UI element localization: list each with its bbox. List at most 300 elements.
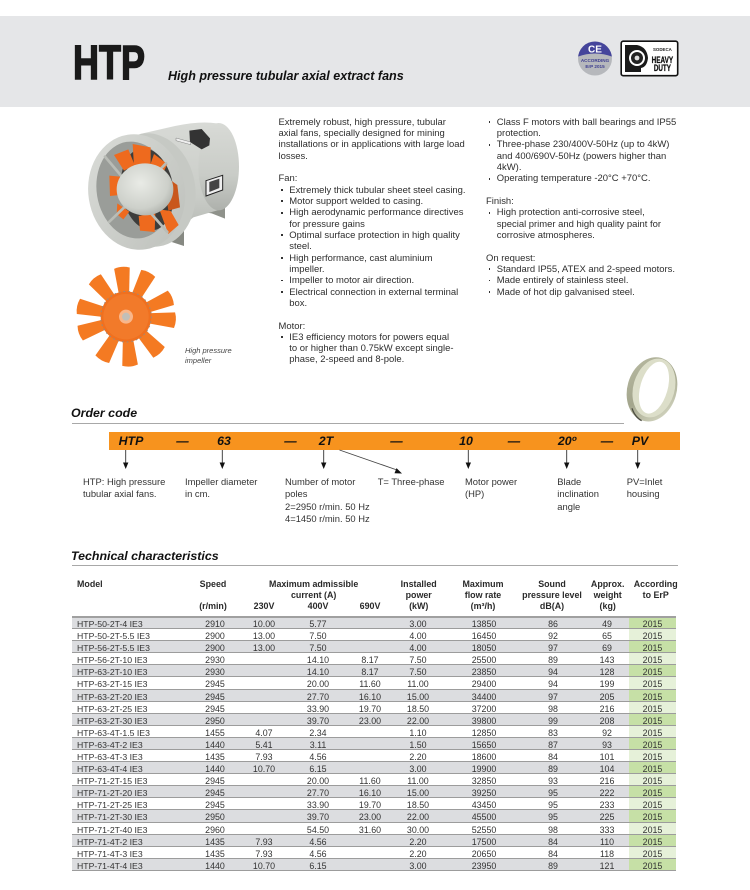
text: motor features bbox=[278, 320, 454, 365]
text: on request: On request: bbox=[486, 253, 535, 264]
text: on request: Made entirely of stainless steel. bbox=[497, 275, 628, 286]
table: technical data: 2015 bbox=[643, 752, 662, 762]
table: technical data: 19900 bbox=[472, 764, 496, 774]
product image: axial fan and impeller bbox=[76, 122, 239, 367]
table: technical data: 19.70 bbox=[359, 800, 381, 810]
label: inlet housing bbox=[627, 476, 662, 499]
table header: to ErP bbox=[643, 590, 669, 600]
table: technical data: 15.00 bbox=[407, 788, 429, 798]
table: technical data: 4.07 bbox=[255, 728, 273, 738]
table: technical data: HTP-56-2T-10 IE3 bbox=[77, 655, 148, 665]
table: technical data: 222 bbox=[600, 788, 614, 798]
table: technical data: 16.10 bbox=[359, 788, 381, 798]
table: technical data: 23850 bbox=[472, 667, 496, 677]
table: technical data: 2945 bbox=[205, 679, 225, 689]
label: motor power bbox=[465, 476, 517, 499]
table: technical data: 118 bbox=[600, 849, 614, 859]
table: technical data: 7.93 bbox=[255, 849, 273, 859]
icon: CE ErP 2015 badge: ACCORDING bbox=[581, 58, 610, 63]
table: technical data: 2945 bbox=[205, 800, 225, 810]
table: technical data: HTP-63-2T-30 IE3 bbox=[77, 716, 148, 726]
table: technical data: 2015 bbox=[643, 788, 662, 798]
table: technical data: HTP-63-2T-20 IE3 bbox=[77, 692, 148, 702]
table: technical data: HTP-50-2T-5.5 IE3 bbox=[77, 631, 150, 641]
label: three-phase: T= Three-phase bbox=[378, 476, 444, 486]
text: motor features continued: and 400/690V-50Hz (powers higher than bbox=[497, 151, 666, 162]
table: technical data: 23950 bbox=[472, 861, 496, 871]
table: technical data: 65 bbox=[602, 631, 612, 641]
table: technical data: 14.10 bbox=[307, 667, 329, 677]
table: technical data: 2015 bbox=[643, 631, 662, 641]
table: technical data: HTP-63-4T-1.5 IE3 bbox=[77, 728, 150, 738]
table: technical data: 2015 bbox=[643, 812, 662, 822]
table: technical data: 2015 bbox=[643, 728, 662, 738]
table: technical data: 33.90 bbox=[307, 800, 329, 810]
table: technical data: 32850 bbox=[472, 776, 496, 786]
table: technical data: 1.50 bbox=[409, 740, 427, 750]
table header: 690V bbox=[360, 600, 380, 610]
label: motor power: Motor power bbox=[465, 476, 517, 486]
table: technical data: 1435 bbox=[205, 837, 225, 847]
table: technical data: 2015 bbox=[643, 716, 662, 726]
label: blade angle: angle bbox=[557, 501, 580, 512]
table: technical data: 3.11 bbox=[310, 740, 326, 750]
table: technical data: 10.70 bbox=[253, 764, 275, 774]
text: intro: installations or in applications with large load bbox=[278, 139, 465, 150]
table: technical data: 2015 bbox=[643, 861, 662, 871]
text: finish: Finish: bbox=[486, 196, 514, 207]
table: technical data: HTP-71-4T-3 IE3 bbox=[77, 849, 143, 859]
table header: power bbox=[406, 590, 432, 600]
text: motor features continued: 4kW). bbox=[497, 162, 521, 173]
text: fan features: steel. bbox=[289, 241, 312, 252]
table: technical data: HTP-71-2T-40 IE3 bbox=[77, 825, 148, 835]
table: technical data: HTP-63-2T-10 IE3 bbox=[77, 667, 148, 677]
table: technical data: 17500 bbox=[472, 837, 496, 847]
table: technical data: 30.00 bbox=[407, 825, 429, 835]
table: technical data: 22.00 bbox=[407, 716, 429, 726]
table: technical data: 2015 bbox=[643, 740, 662, 750]
table: technical data: 7.93 bbox=[255, 752, 273, 762]
text: fan features: Fan: bbox=[278, 173, 297, 184]
table: technical data: 18050 bbox=[472, 643, 496, 653]
text: motor features continued: protection. bbox=[497, 128, 541, 139]
table: technical data: 333 bbox=[600, 825, 614, 835]
text: motor features: IE3 efficiency motors for powers equal bbox=[289, 332, 449, 343]
table: technical data: 2945 bbox=[205, 788, 225, 798]
table: technical data: 2.20 bbox=[409, 752, 427, 762]
table: technical data: 2015 bbox=[643, 764, 662, 774]
order code bar: 10 bbox=[459, 434, 473, 448]
table: technical data: 7.50 bbox=[409, 655, 427, 665]
table header: weight bbox=[594, 590, 622, 600]
text: intro: Extremely robust, high pressure, tubular bbox=[278, 117, 446, 128]
table: technical data: 2945 bbox=[205, 776, 225, 786]
table: technical data: 2015 bbox=[643, 849, 662, 859]
table: technical data: 45500 bbox=[472, 812, 496, 822]
table header: Maximum bbox=[463, 579, 503, 589]
table: technical data: 19.70 bbox=[359, 704, 381, 714]
table: technical data: 11.60 bbox=[359, 776, 381, 786]
text: motor features continued: Operating temperature -20°C +70°C. bbox=[497, 173, 650, 184]
label: inlet housing: PV=Inlet bbox=[627, 476, 662, 486]
table: technical data: 8.17 bbox=[361, 667, 379, 677]
table: technical data: 2930 bbox=[205, 667, 225, 677]
icon: CE ErP 2015 badge: CE bbox=[588, 44, 602, 56]
table: technical data: 2015 bbox=[643, 692, 662, 702]
table: technical data: 2015 bbox=[643, 655, 662, 665]
table: technical data: 20.00 bbox=[307, 679, 329, 689]
table: technical data: 27.70 bbox=[307, 788, 329, 798]
table header: 400V bbox=[308, 600, 328, 610]
text: fan features: Electrical connection in external terminal bbox=[289, 287, 458, 298]
table: technical data: 2900 bbox=[205, 631, 225, 641]
text: motor features continued: Three-phase 230/400V-50Hz (up to 4kW) bbox=[497, 139, 669, 150]
table: technical data: 92 bbox=[548, 631, 558, 641]
fan blades bbox=[109, 144, 180, 234]
table: technical data: 13.00 bbox=[253, 643, 275, 653]
table: technical data: 4.56 bbox=[309, 837, 327, 847]
text: fan features: for pressure gains bbox=[289, 219, 365, 230]
table: technical data: HTP-71-4T-2 IE3 bbox=[77, 837, 143, 847]
table: technical data: 2.20 bbox=[409, 849, 427, 859]
table: technical data: 43450 bbox=[472, 800, 496, 810]
heading: order code: Order code bbox=[71, 406, 137, 420]
text: fan features: box. bbox=[289, 298, 307, 309]
text: motor features: to or higher than 0.75kW except single- bbox=[289, 343, 454, 354]
text: motor features continued bbox=[489, 117, 676, 184]
label: HTP bbox=[83, 476, 165, 499]
table: technical data: 4.56 bbox=[309, 849, 327, 859]
table: technical data: 5.41 bbox=[255, 740, 273, 750]
arrow: PV bbox=[635, 450, 640, 469]
table: technical data: HTP-71-2T-20 IE3 bbox=[77, 788, 148, 798]
table: technical data: 94 bbox=[548, 679, 558, 689]
table: technical data: 2910 bbox=[205, 619, 225, 629]
table: technical data: 14.10 bbox=[307, 655, 329, 665]
text: fan features bbox=[278, 173, 466, 309]
table: technical data: 89 bbox=[548, 764, 558, 774]
table: technical data: 1.10 bbox=[409, 728, 427, 738]
table: technical data: 16.10 bbox=[359, 692, 381, 702]
heading: technical characteristics: Technical characteristics bbox=[71, 548, 219, 562]
order code bar: PV bbox=[632, 434, 648, 448]
label: impeller diameter: Impeller diameter bbox=[185, 476, 257, 486]
table: technical data: 15.00 bbox=[407, 692, 429, 702]
table: technical data: 4.56 bbox=[309, 752, 327, 762]
label: motor poles: poles bbox=[285, 488, 307, 499]
text: finish: special primer and high quality paint for bbox=[497, 219, 661, 230]
table: technical data: 11.00 bbox=[407, 679, 429, 689]
order code bar: — bbox=[601, 434, 613, 448]
table header: (m³/h) bbox=[471, 600, 495, 610]
table header: pressure level bbox=[522, 590, 582, 600]
table: technical data: HTP-56-2T-5.5 IE3 bbox=[77, 643, 150, 653]
table header: (r/min) bbox=[199, 600, 227, 610]
table: technical data: HTP-71-2T-15 IE3 bbox=[77, 776, 148, 786]
title: HTP bbox=[72, 37, 144, 90]
text: motor features continued: Class F motors with ball bearings and IP55 bbox=[497, 117, 676, 128]
table: technical data: HTP-71-2T-30 IE3 bbox=[77, 812, 148, 822]
arrow: 2T bbox=[321, 450, 326, 469]
table: technical data: 2.34 bbox=[309, 728, 327, 738]
table: technical data: 95 bbox=[548, 788, 558, 798]
icon: Sodeca heavy duty badge: SODECA bbox=[653, 47, 673, 52]
table: technical data: 2015 bbox=[643, 643, 662, 653]
table: technical data: 15650 bbox=[472, 740, 496, 750]
text: fan features: Motor support welded to casing. bbox=[289, 196, 423, 207]
table header: Sound bbox=[538, 579, 566, 589]
text: finish: corrosive atmospheres. bbox=[497, 230, 595, 241]
text: motor features: phase, 2-speed and 8-pole. bbox=[289, 354, 404, 365]
table: technical data: HTP-71-4T-4 IE3 bbox=[77, 861, 143, 871]
table: technical data: 12850 bbox=[472, 728, 496, 738]
table: technical data: 83 bbox=[548, 728, 558, 738]
table: technical data: 205 bbox=[600, 692, 614, 702]
table: technical data: 7.50 bbox=[309, 643, 327, 653]
table: technical data: 31.60 bbox=[359, 825, 381, 835]
table: technical data: 233 bbox=[600, 800, 614, 810]
table: technical data: 52550 bbox=[472, 825, 496, 835]
table: technical data: 2945 bbox=[205, 704, 225, 714]
table header: 230V bbox=[254, 600, 274, 610]
label: motor poles bbox=[285, 476, 370, 524]
label: motor poles: Number of motor bbox=[285, 476, 355, 486]
table: technical data: 92 bbox=[602, 728, 612, 738]
label: HTP: HTP: High pressure bbox=[83, 476, 165, 487]
table: technical data: 98 bbox=[548, 704, 558, 714]
order code bar: 20º bbox=[558, 434, 576, 448]
table: technical data: 2015 bbox=[643, 704, 662, 714]
table: technical data: 143 bbox=[600, 655, 614, 665]
table: technical data: 27.70 bbox=[307, 692, 329, 702]
text: fan features: Extremely thick tubular sheet steel casing. bbox=[289, 185, 466, 196]
hub and struts bbox=[105, 157, 173, 232]
table: technical data: 128 bbox=[600, 667, 614, 677]
order code bar: 2T bbox=[319, 434, 333, 448]
text: on request: Made of hot dip galvanised steel. bbox=[497, 287, 635, 298]
table: technical data: 16450 bbox=[472, 631, 496, 641]
table: technical data: 20.00 bbox=[307, 776, 329, 786]
table header: (kW) bbox=[409, 600, 428, 610]
table: technical data: 6.15 bbox=[309, 861, 327, 871]
table: technical data: 2015 bbox=[643, 679, 662, 689]
table: technical data: 2945 bbox=[205, 692, 225, 702]
table: technical data: 93 bbox=[548, 776, 558, 786]
order code bar: — bbox=[284, 434, 297, 448]
table: technical data: 121 bbox=[600, 861, 614, 871]
caption: impeller bbox=[185, 346, 232, 365]
label: blade angle bbox=[557, 476, 599, 512]
table: technical data bbox=[72, 616, 676, 871]
text: motor features: Motor: bbox=[278, 320, 305, 332]
text: on request: Standard IP55, ATEX and 2-speed motors. bbox=[497, 264, 675, 275]
table: technical data: 22.00 bbox=[407, 812, 429, 822]
icon: Sodeca heavy duty badge bbox=[620, 40, 678, 76]
table: technical data: 1440 bbox=[205, 764, 225, 774]
table: technical data: 3.00 bbox=[409, 861, 427, 871]
label: motor poles: 4=1450 r/min. 50 Hz bbox=[285, 513, 370, 524]
table: technical data: 99 bbox=[548, 716, 558, 726]
table: technical data: 89 bbox=[548, 861, 558, 871]
text: intro bbox=[278, 117, 465, 162]
table: technical data: 1440 bbox=[205, 740, 225, 750]
label: motor power: (HP) bbox=[465, 488, 484, 499]
table: technical data: 1435 bbox=[205, 752, 225, 762]
table: technical data: 5.77 bbox=[309, 619, 327, 629]
table header: According bbox=[634, 579, 678, 589]
table: technical data: 7.93 bbox=[255, 837, 273, 847]
table: technical data: 39250 bbox=[472, 788, 496, 798]
table: technical data: 199 bbox=[600, 679, 614, 689]
table: technical data: 84 bbox=[548, 849, 558, 859]
table: technical data: 8.17 bbox=[361, 655, 379, 665]
table: technical data: HTP-63-2T-25 IE3 bbox=[77, 704, 148, 714]
table: technical data: 2015 bbox=[643, 825, 662, 835]
table: technical data: 4.00 bbox=[409, 643, 427, 653]
label: motor poles: 2=2950 r/min. 50 Hz bbox=[285, 501, 370, 512]
table: technical data: 6.15 bbox=[309, 764, 327, 774]
arrow: 20 degrees bbox=[564, 450, 569, 469]
table: technical data: 4.00 bbox=[409, 631, 427, 641]
table: technical data: HTP-63-4T-2 IE3 bbox=[77, 740, 143, 750]
table: technical data: 13850 bbox=[472, 619, 496, 629]
table: technical data: 2930 bbox=[205, 655, 225, 665]
text: fan features: impeller. bbox=[289, 264, 324, 275]
table: technical data: 39.70 bbox=[307, 716, 329, 726]
table: technical data: HTP-63-2T-15 IE3 bbox=[77, 679, 148, 689]
label: blade angle: Blade bbox=[557, 476, 581, 486]
impeller blades bbox=[75, 266, 176, 367]
table: technical data: 84 bbox=[548, 837, 558, 847]
caption: impeller: High pressure bbox=[185, 346, 232, 355]
table: technical data: 97 bbox=[548, 692, 558, 702]
label: HTP: tubular axial fans. bbox=[83, 488, 156, 499]
label: impeller diameter: in cm. bbox=[185, 488, 210, 499]
table: technical data: 104 bbox=[600, 764, 614, 774]
order code bar: 63 bbox=[217, 434, 231, 448]
table: technical data: 39.70 bbox=[307, 812, 329, 822]
table: technical data: 97 bbox=[548, 643, 558, 653]
table: technical data: 25500 bbox=[472, 655, 496, 665]
order code bar: HTP bbox=[119, 434, 143, 448]
table: technical data: 34400 bbox=[472, 692, 496, 702]
table: technical data: 11.00 bbox=[407, 776, 429, 786]
icon: CE ErP 2015 badge: ErP 2015 bbox=[585, 64, 605, 69]
impeller hub bbox=[101, 291, 151, 342]
table: technical data: 23.00 bbox=[359, 812, 381, 822]
caption: impeller: impeller bbox=[185, 356, 211, 365]
text: intro: losses. bbox=[278, 151, 308, 162]
table: technical data: HTP-50-2T-4 IE3 bbox=[77, 619, 143, 629]
text: finish bbox=[486, 196, 661, 241]
text: intro: axial fans, specially designed for mining bbox=[278, 128, 445, 139]
table: technical data: 1455 bbox=[205, 728, 225, 738]
table: technical data: 18.50 bbox=[407, 800, 429, 810]
table header: Speed bbox=[200, 579, 226, 589]
table: technical data: 86 bbox=[548, 619, 558, 629]
table: technical data: 110 bbox=[600, 837, 614, 847]
table: technical data: 2015 bbox=[643, 619, 662, 629]
table: technical data: 18.50 bbox=[407, 704, 429, 714]
table: technical data: 2015 bbox=[643, 776, 662, 786]
order code bar bbox=[109, 432, 680, 450]
table: technical data: 3.00 bbox=[409, 764, 427, 774]
label: inlet housing: housing bbox=[627, 488, 660, 499]
order code bar: — bbox=[176, 434, 189, 448]
table header: Maximum admissible bbox=[269, 579, 358, 589]
table: technical data: 37200 bbox=[472, 704, 496, 714]
table: technical data: HTP-63-4T-3 IE3 bbox=[77, 752, 143, 762]
label: blade angle: inclination bbox=[557, 488, 599, 499]
table: technical data: 20650 bbox=[472, 849, 496, 859]
table: technical data: 13.00 bbox=[253, 631, 275, 641]
table: technical data: 2950 bbox=[205, 716, 225, 726]
table: technical data: 216 bbox=[600, 776, 614, 786]
table: technical data: 49 bbox=[602, 619, 612, 629]
table: technical data: 10.00 bbox=[253, 619, 275, 629]
table: technical data: 216 bbox=[600, 704, 614, 714]
table: technical data: 1435 bbox=[205, 849, 225, 859]
table: technical data: 10.70 bbox=[253, 861, 275, 871]
table: technical data: 7.50 bbox=[409, 667, 427, 677]
label: impeller diameter bbox=[185, 476, 258, 499]
order code arrows bbox=[123, 450, 640, 474]
table: technical data: 93 bbox=[602, 740, 612, 750]
text: fan features: High performance, cast aluminium bbox=[289, 253, 432, 264]
table: technical data: 101 bbox=[600, 752, 614, 762]
icon: CE ErP 2015 badge bbox=[578, 42, 612, 76]
arrow: 10 bbox=[466, 450, 471, 469]
table: technical data: 11.60 bbox=[359, 679, 381, 689]
table: technical data: 33.90 bbox=[307, 704, 329, 714]
table: technical data: 54.50 bbox=[307, 825, 329, 835]
table: technical data: 23.00 bbox=[359, 716, 381, 726]
table: technical data: 2950 bbox=[205, 812, 225, 822]
table: technical data: HTP-71-2T-25 IE3 bbox=[77, 800, 148, 810]
product image: inlet housing ring bbox=[626, 357, 678, 422]
table header bbox=[77, 579, 678, 611]
order code bar: — bbox=[390, 434, 403, 448]
table: technical data: 69 bbox=[602, 643, 612, 653]
table: technical data: 2015 bbox=[643, 837, 662, 847]
table: technical data: 2960 bbox=[205, 825, 225, 835]
subtitle: High pressure tubular axial extract fans bbox=[168, 69, 404, 83]
table: technical data: 208 bbox=[600, 716, 614, 726]
fan housing bbox=[80, 122, 239, 257]
table: technical data: 2900 bbox=[205, 643, 225, 653]
table: technical data: 94 bbox=[548, 667, 558, 677]
table: technical data: 1440 bbox=[205, 861, 225, 871]
text: fan features: Optimal surface protection in high quality bbox=[289, 230, 460, 241]
table header: (kg) bbox=[600, 600, 616, 610]
header band bbox=[0, 16, 750, 107]
text: on request bbox=[486, 253, 675, 298]
arrow: HTP bbox=[123, 450, 128, 469]
table: technical data: 18600 bbox=[472, 752, 496, 762]
table header: dB(A) bbox=[540, 600, 564, 610]
text: fan features: Impeller to motor air direction. bbox=[289, 275, 414, 286]
table: technical data: 39800 bbox=[472, 716, 496, 726]
text: fan features: High aerodynamic performance directives bbox=[289, 207, 463, 218]
table: technical data: 3.00 bbox=[409, 619, 427, 629]
table: technical data: 225 bbox=[600, 812, 614, 822]
table: technical data: 7.50 bbox=[309, 631, 327, 641]
table header: Model bbox=[77, 579, 103, 589]
text column: description, fan, motor bbox=[278, 117, 466, 365]
table: technical data: 98 bbox=[548, 825, 558, 835]
text column: motor continued, finish, on request bbox=[486, 117, 676, 298]
